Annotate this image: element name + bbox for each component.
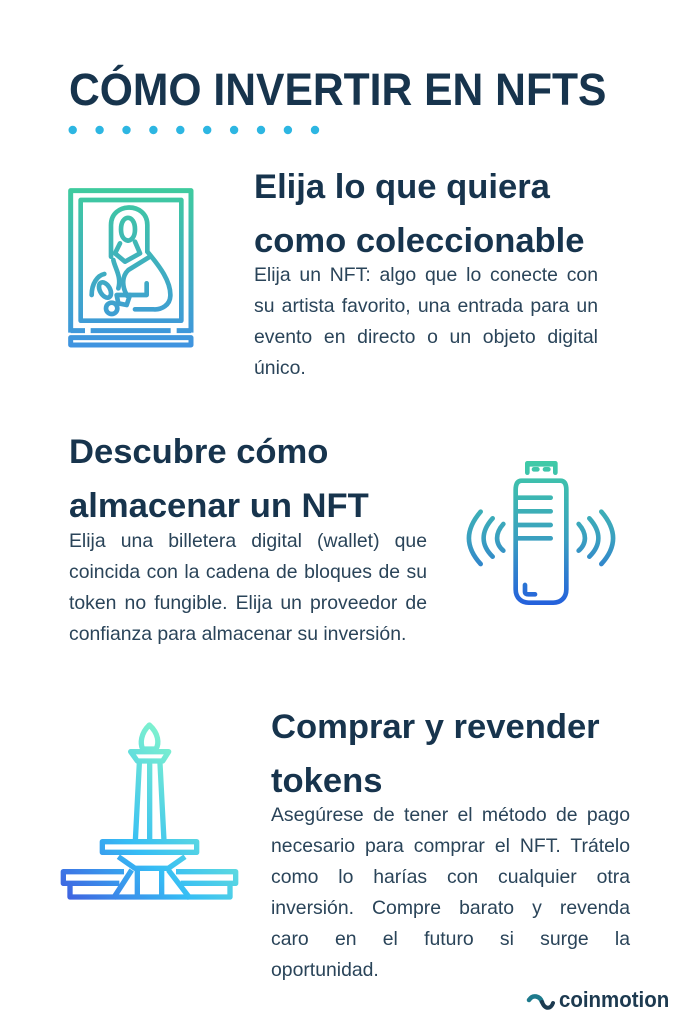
dotted divider under title xyxy=(68,126,320,134)
text: section 3 body: necesario para comprar el NFT. Trátelo xyxy=(271,835,630,857)
text: section 2 body: confianza para almacenar su inversión. xyxy=(69,623,406,645)
text: section 1 body: su artista favorito, una entrada para un xyxy=(254,295,598,317)
text: section 3 body: inversión. Compre barato y revenda xyxy=(271,897,630,919)
title: CÓMO INVERTIR EN NFTS xyxy=(69,64,606,115)
text: section 3 body: como lo harías con cualquier otra xyxy=(271,866,630,888)
text: section 2 body: coincida con la cadena de bloques de su xyxy=(69,561,427,583)
heading: section 2: Descubre cómo xyxy=(69,433,328,471)
text: logo wordmark: coinmotion xyxy=(559,987,669,1012)
icon: wireless USB token xyxy=(466,461,616,605)
heading: section 2: almacenar un NFT xyxy=(69,487,369,525)
text: section 1 body: Elija un NFT: algo que lo conecte con xyxy=(254,264,598,286)
heading: section 3 xyxy=(271,708,600,800)
icon: framed portrait xyxy=(68,188,194,348)
text: section 3 body: Asegúrese de tener el método de pago xyxy=(271,804,630,826)
heading: section 3: tokens xyxy=(271,762,382,800)
heading: section 3: Comprar y revender xyxy=(271,708,600,746)
heading: section 2 xyxy=(69,433,369,525)
text: section 2 body: token no fungible. Elija un proveedor de xyxy=(69,592,427,614)
logo: coinmotion xyxy=(526,987,669,1012)
icon: logo swoosh xyxy=(526,994,556,1010)
icon: monument tower xyxy=(60,722,238,900)
text: section 2 body: Elija una billetera digital (wallet) que xyxy=(69,530,427,552)
text: section 1 body: evento en directo o un objeto digital xyxy=(254,326,598,348)
text: section 3 body xyxy=(271,804,630,981)
text: section 1 body xyxy=(254,264,598,379)
heading: section 1: como coleccionable xyxy=(254,222,585,260)
text: section 3 body: oportunidad. xyxy=(271,959,379,981)
heading: section 1 xyxy=(254,168,585,260)
text: section 1 body: único. xyxy=(254,357,306,379)
text: section 3 body: caro en el futuro si surge la xyxy=(271,928,630,950)
heading: section 1: Elija lo que quiera xyxy=(254,168,550,206)
text: section 2 body xyxy=(69,530,427,645)
